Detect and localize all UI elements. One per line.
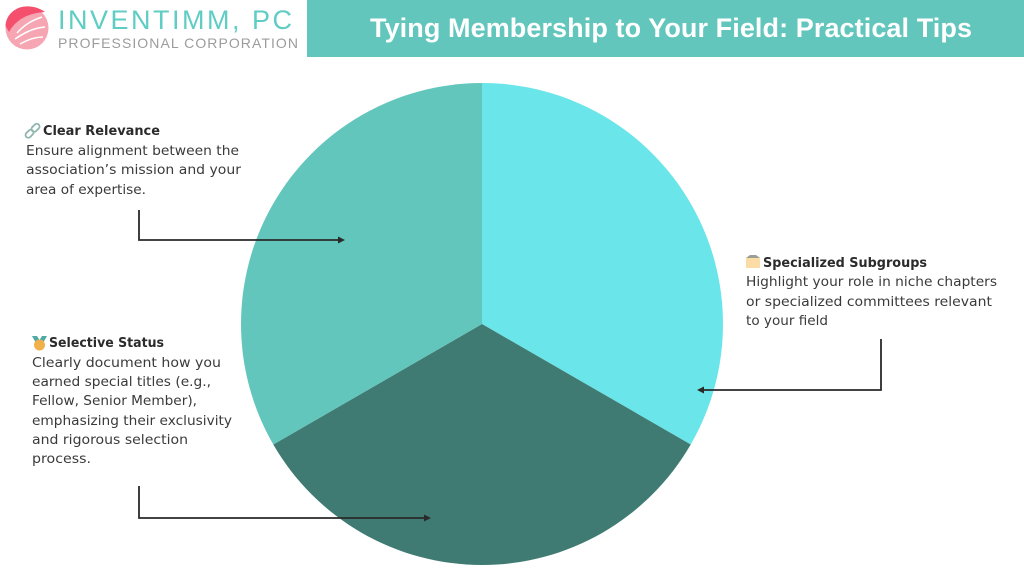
arrow: clear relevance (139, 210, 345, 244)
text block: clear relevance (24, 123, 241, 198)
body text: emphasizing their exclusivity (32, 413, 232, 429)
title banner (307, 0, 1024, 57)
slice: selective status (273, 324, 691, 565)
body text: association’s mission and your (26, 162, 241, 178)
header logo (6, 5, 298, 51)
body text: and rigorous selection (32, 432, 188, 448)
body text (26, 143, 241, 198)
body text: earned special titles (e.g., (32, 374, 211, 390)
icon: link (24, 123, 41, 139)
body text: or specialized committees relevant (746, 294, 992, 310)
body text: Highlight your role in niche chapters (746, 274, 997, 290)
logo tagline: PROFESSIONAL CORPORATION (58, 35, 298, 51)
body text: Clearly document how you (32, 355, 221, 371)
body text: process. (32, 451, 91, 467)
body text: to your field (746, 313, 828, 329)
heading: Clear Relevance (43, 124, 160, 139)
body text: Ensure alignment between the (26, 143, 239, 159)
logo name: INVENTIMM, PC (58, 5, 292, 35)
body text (32, 355, 232, 467)
body text (746, 274, 997, 329)
heading: Specialized Subgroups (763, 256, 927, 271)
icon: medal (32, 336, 47, 350)
body text: Fellow, Senior Member), (32, 393, 197, 409)
pie chart (241, 83, 723, 565)
icon: logo emblem (6, 6, 48, 49)
slice: specialized subgroups (482, 83, 723, 444)
icon: folder (746, 255, 760, 268)
heading: Selective Status (49, 336, 164, 351)
title: Tying Membership to Your Field: Practical Tips (370, 13, 972, 43)
text block: specialized subgroups (746, 255, 997, 329)
text block: selective status (32, 336, 232, 467)
arrow: selective status (139, 486, 431, 522)
arrow: specialized subgroups (697, 339, 881, 394)
body text: area of expertise. (26, 182, 146, 198)
slice: clear relevance (241, 83, 482, 444)
